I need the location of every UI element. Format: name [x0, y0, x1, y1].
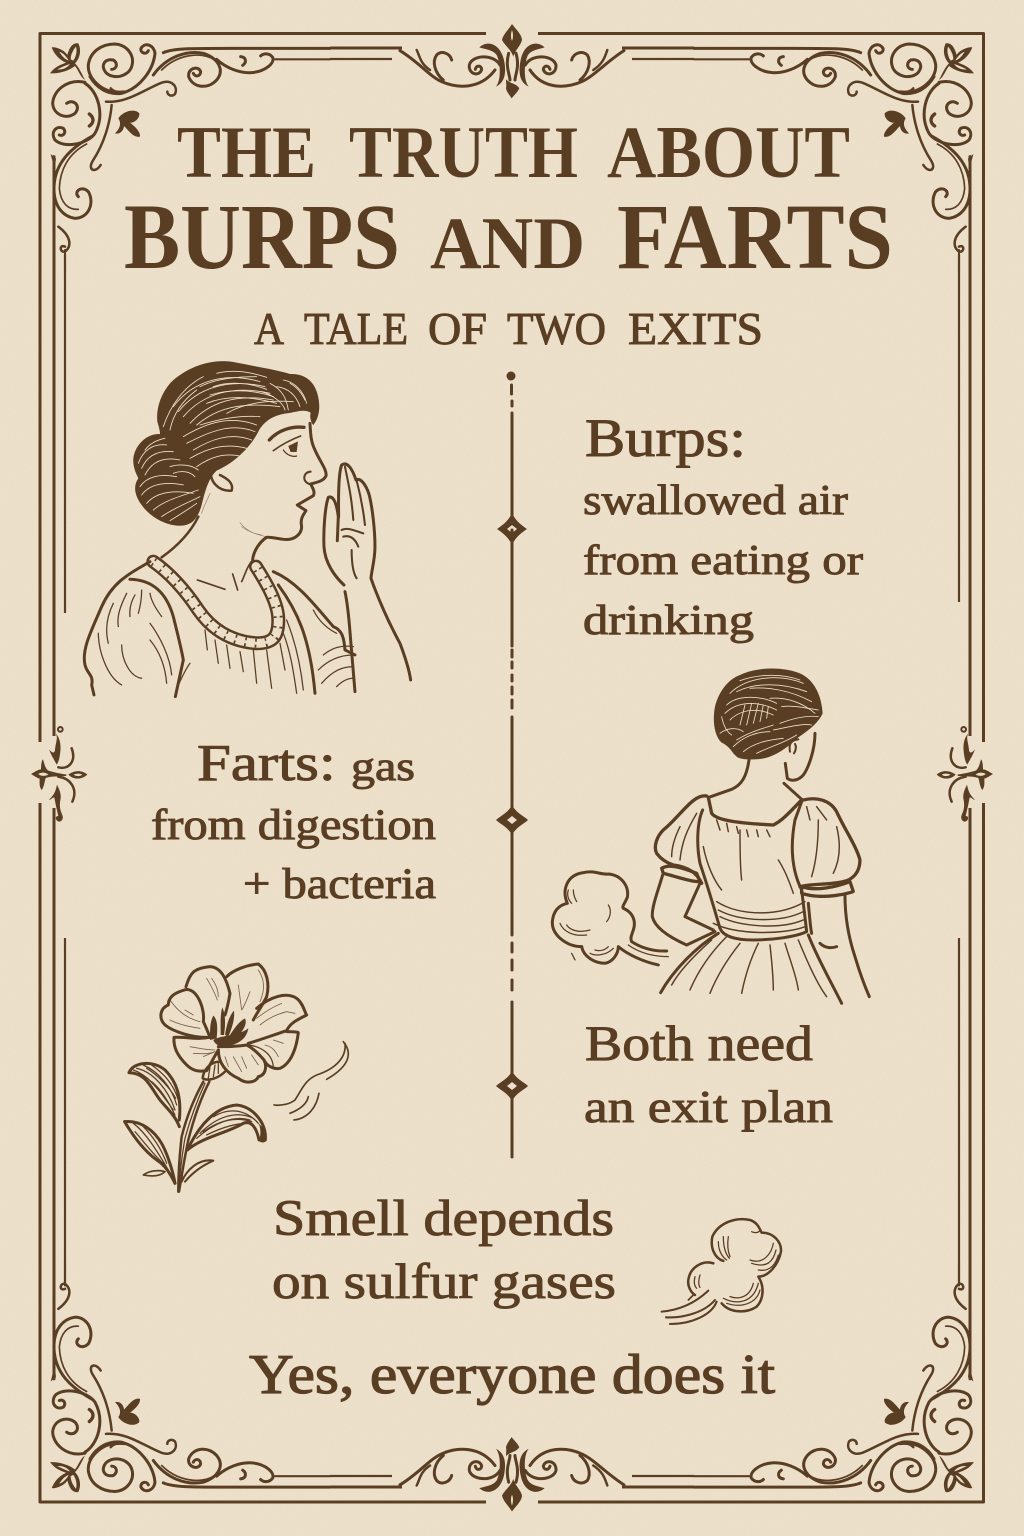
text: farts definition: from digestion [151, 802, 436, 849]
gas cloud [552, 872, 668, 965]
text: smell depends on sulfur gases: Smell depends [273, 1191, 614, 1247]
face profile [253, 423, 326, 559]
nostril [304, 472, 311, 484]
arms [652, 875, 715, 945]
diamond node 2 [496, 805, 528, 835]
neck and cheek [711, 760, 749, 797]
dress outline [84, 562, 150, 695]
title: FARTS [617, 186, 893, 289]
leaves [125, 1063, 266, 1183]
illustration: woman covering a burp, side profile [84, 361, 411, 697]
icon: small gas cloud [662, 1219, 781, 1324]
calyx and stem [203, 1062, 225, 1080]
text: farts definition: Farts: gas [197, 735, 415, 792]
scent wisps [274, 1042, 348, 1120]
lace collar [153, 562, 278, 643]
text: burps definition: from eating or [583, 538, 863, 584]
title: BURPS [124, 186, 400, 289]
hair highlights [138, 371, 307, 521]
stamens [210, 1007, 248, 1047]
text: burps definition: drinking [583, 598, 754, 644]
skirt [661, 933, 718, 993]
corner ornament: top right [694, 43, 974, 273]
subtitle: TWO [507, 303, 606, 354]
hair highlights [720, 675, 818, 753]
side ornament: right [937, 727, 993, 822]
subtitle: A [254, 303, 284, 354]
neck lines [162, 517, 198, 557]
diamond node 1 [497, 513, 527, 545]
text: both need an exit plan: an exit plan [584, 1081, 833, 1132]
closing line: Yes, everyone does it [249, 1344, 775, 1406]
raised hand [324, 464, 411, 692]
illustration: woman from behind with gas cloud [552, 669, 869, 1003]
text: burps definition [583, 408, 863, 644]
subtitle: OF [428, 303, 487, 354]
subtitle: TALE [304, 303, 408, 354]
title: THE [177, 112, 316, 194]
title: AND [430, 203, 585, 285]
title [124, 112, 893, 289]
dress fold hatching [98, 590, 353, 693]
hair [714, 669, 823, 759]
right puff sleeve [800, 799, 860, 887]
bottom center flourish [400, 1437, 624, 1512]
illustration: flower with scent wisps [125, 964, 348, 1192]
text: smell depends on sulfur gases: on sulfur gases [272, 1253, 616, 1309]
eye [273, 436, 301, 456]
ear [211, 471, 232, 491]
text: farts definition [151, 735, 436, 908]
corner ornament: bottom left [50, 1262, 330, 1492]
text: burps definition: swallowed air [583, 478, 848, 524]
central divider [496, 372, 528, 1157]
corner ornament: bottom right [694, 1262, 974, 1492]
text: both need an exit plan: Both need [585, 1015, 813, 1071]
petal hatching [170, 970, 295, 1072]
bodice [708, 797, 802, 825]
text: burps definition: Burps: [585, 408, 746, 468]
text: farts definition: + bacteria [243, 861, 436, 908]
diamond node 3 [496, 1071, 528, 1101]
title: TRUTH [349, 112, 578, 194]
petals [186, 967, 230, 1015]
corner ornament: top left [50, 43, 330, 273]
hair [133, 361, 319, 526]
subtitle: EXITS [628, 303, 763, 354]
title: ABOUT [607, 112, 850, 194]
text: both need an exit plan [584, 1015, 833, 1132]
text: smell depends on sulfur gases [272, 1191, 616, 1309]
subtitle [254, 303, 763, 354]
dress folds [672, 807, 839, 997]
top center flourish [400, 24, 624, 98]
side ornament: left [31, 727, 87, 822]
left puff sleeve [655, 796, 707, 883]
